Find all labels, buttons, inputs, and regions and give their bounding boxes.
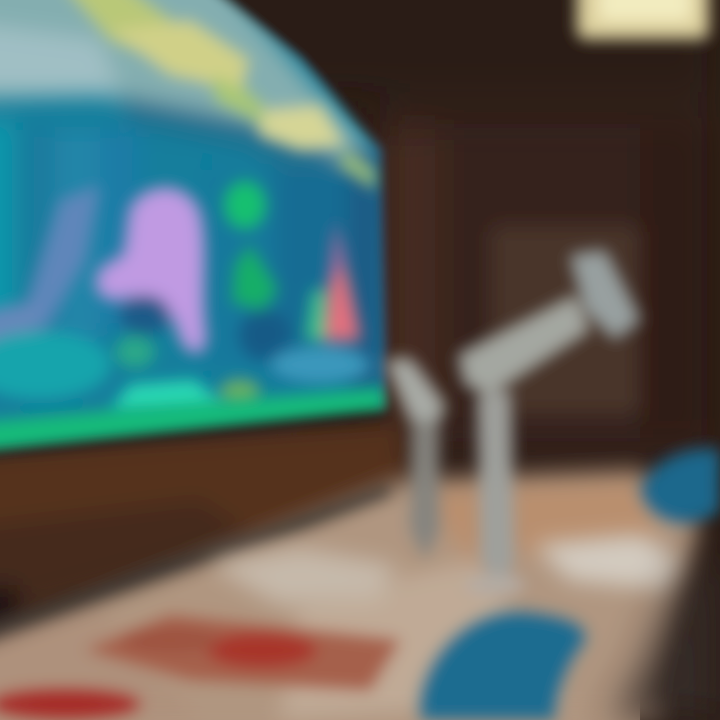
screen right edge shadow xyxy=(382,150,386,410)
back wall xyxy=(200,0,720,460)
lower wall under screen xyxy=(0,420,410,630)
lower teal xyxy=(0,331,110,399)
table surface xyxy=(0,470,700,720)
ceiling light xyxy=(578,0,708,38)
bright teal mound xyxy=(110,380,225,412)
red triangle xyxy=(325,225,360,340)
lavender ribbon xyxy=(20,185,100,330)
screen xyxy=(0,0,400,455)
green blob mid xyxy=(232,245,278,310)
yellow streaks xyxy=(66,0,174,50)
wall panel xyxy=(490,225,640,415)
olive patch xyxy=(220,380,260,404)
white paper right xyxy=(535,535,680,590)
red mat front xyxy=(0,689,140,719)
dark blue right column xyxy=(272,172,350,391)
blue object front xyxy=(420,611,586,720)
dark teal lump xyxy=(239,309,291,361)
left columns xyxy=(0,120,15,360)
table underlay xyxy=(0,680,640,720)
green blob top xyxy=(224,181,266,229)
microphone: back xyxy=(385,358,445,560)
purple blob xyxy=(97,188,206,352)
sky band xyxy=(0,0,380,180)
red mat on table xyxy=(85,615,400,690)
microphone: front xyxy=(458,250,640,595)
table edge shadow xyxy=(0,490,390,640)
dark corner lower right xyxy=(610,540,720,720)
bottom green band xyxy=(0,388,385,455)
screen base xyxy=(0,0,400,450)
screen bottom edge shadow xyxy=(0,414,385,456)
white paper on table xyxy=(210,548,395,605)
blue object right xyxy=(640,449,720,523)
